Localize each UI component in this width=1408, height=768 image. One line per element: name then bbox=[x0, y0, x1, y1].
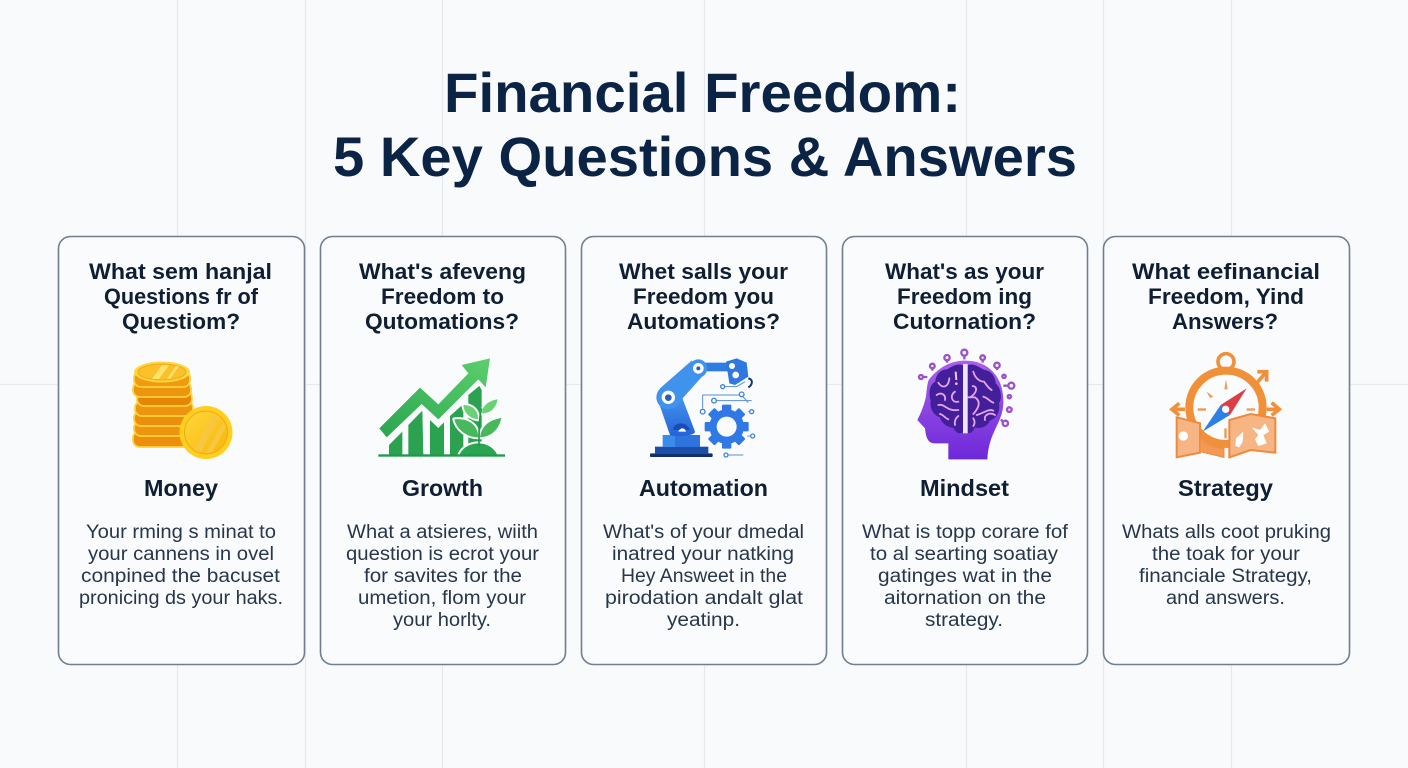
body text: mindset: strategy. bbox=[925, 610, 1003, 631]
icon: brain in head bbox=[917, 350, 1014, 459]
heading: growth question: Qutomations? bbox=[365, 309, 519, 334]
icon: robot arm and gear bbox=[650, 358, 755, 457]
body text: growth: question is ecrot your bbox=[346, 544, 540, 565]
heading: money question: Questions fr of bbox=[104, 284, 259, 309]
body text: mindset: gatinges wat in the bbox=[878, 566, 1052, 587]
heading: automation question: Freedom you bbox=[633, 284, 774, 309]
title bbox=[333, 61, 1077, 188]
icon: compass and map bbox=[1172, 354, 1279, 457]
body text: strategy: and answers. bbox=[1166, 588, 1285, 609]
body text: money: Your rming s minat to bbox=[86, 522, 276, 543]
label: Mindset: Mindset bbox=[920, 475, 1009, 501]
body text: growth: your horlty. bbox=[393, 610, 491, 631]
heading: strategy question bbox=[1132, 259, 1320, 334]
panel: money bbox=[58, 236, 304, 664]
icon: growth chart with plant bbox=[378, 358, 505, 457]
body text: automation: inatred your natking bbox=[612, 544, 794, 565]
heading: growth question bbox=[359, 259, 526, 334]
body text: automation: pirodation andalt glat bbox=[605, 588, 804, 609]
body text: growth: What a atsieres, wiith bbox=[347, 522, 538, 543]
heading: growth question: What's afeveng bbox=[359, 259, 526, 284]
body text: growth bbox=[346, 522, 540, 631]
label: Money: Money bbox=[144, 475, 218, 501]
panel: automation bbox=[582, 236, 826, 664]
heading: growth question: Freedom to bbox=[381, 284, 504, 309]
body text: strategy: Whats alls coot pruking bbox=[1122, 522, 1331, 543]
heading: automation question bbox=[619, 259, 788, 334]
heading: mindset question: Freedom ing bbox=[897, 284, 1032, 309]
body text: strategy: the toak for your bbox=[1152, 544, 1301, 565]
label: Growth: Growth bbox=[402, 475, 483, 501]
label: Strategy: Strategy bbox=[1178, 475, 1273, 501]
title: 5 Key Questions & Answers bbox=[333, 125, 1077, 188]
body text: mindset bbox=[862, 522, 1069, 631]
panel: strategy bbox=[1104, 236, 1350, 664]
body text: strategy: financiale Strategy, bbox=[1139, 566, 1312, 587]
heading: automation question: Automations? bbox=[627, 309, 780, 334]
heading: money question: What sem hanjal bbox=[89, 259, 272, 284]
heading: mindset question: Cutornation? bbox=[893, 309, 1036, 334]
panel: mindset bbox=[842, 236, 1088, 664]
body text: money: pronicing ds your haks. bbox=[79, 588, 283, 609]
icon: coin stack bbox=[133, 362, 232, 459]
body text: automation: Hey Answeet in the bbox=[621, 566, 787, 587]
body text: money: your cannens in ovel bbox=[88, 544, 274, 565]
heading: automation question: Whet salls your bbox=[619, 259, 788, 284]
heading: mindset question: What's as your bbox=[885, 259, 1044, 284]
heading: money question: Questiom? bbox=[122, 309, 240, 334]
heading: money question bbox=[89, 259, 272, 334]
label: Automation: Automation bbox=[639, 475, 768, 501]
title: Financial Freedom: bbox=[444, 61, 961, 124]
body text: strategy bbox=[1122, 522, 1331, 609]
body text: automation: What's of your dmedal bbox=[603, 522, 804, 543]
heading: strategy question: What eefinancial bbox=[1132, 259, 1320, 284]
heading: mindset question bbox=[885, 259, 1044, 334]
heading: strategy question: Freedom, Yind bbox=[1148, 284, 1304, 309]
panel: growth bbox=[320, 236, 566, 664]
body text: mindset: What is topp corare fof bbox=[862, 522, 1069, 543]
body text: money bbox=[79, 522, 283, 609]
body text: automation: yeatinp. bbox=[667, 610, 740, 631]
body text: growth: for savites for the bbox=[364, 566, 522, 587]
body text: mindset: to al searting soatiay bbox=[870, 544, 1059, 565]
body text: mindset: aitornation on the bbox=[884, 588, 1046, 609]
body text: growth: umetion, flom your bbox=[358, 588, 527, 609]
body text: money: conpined the bacuset bbox=[81, 566, 281, 587]
heading: strategy question: Answers? bbox=[1172, 309, 1278, 334]
body text: automation bbox=[603, 522, 804, 631]
